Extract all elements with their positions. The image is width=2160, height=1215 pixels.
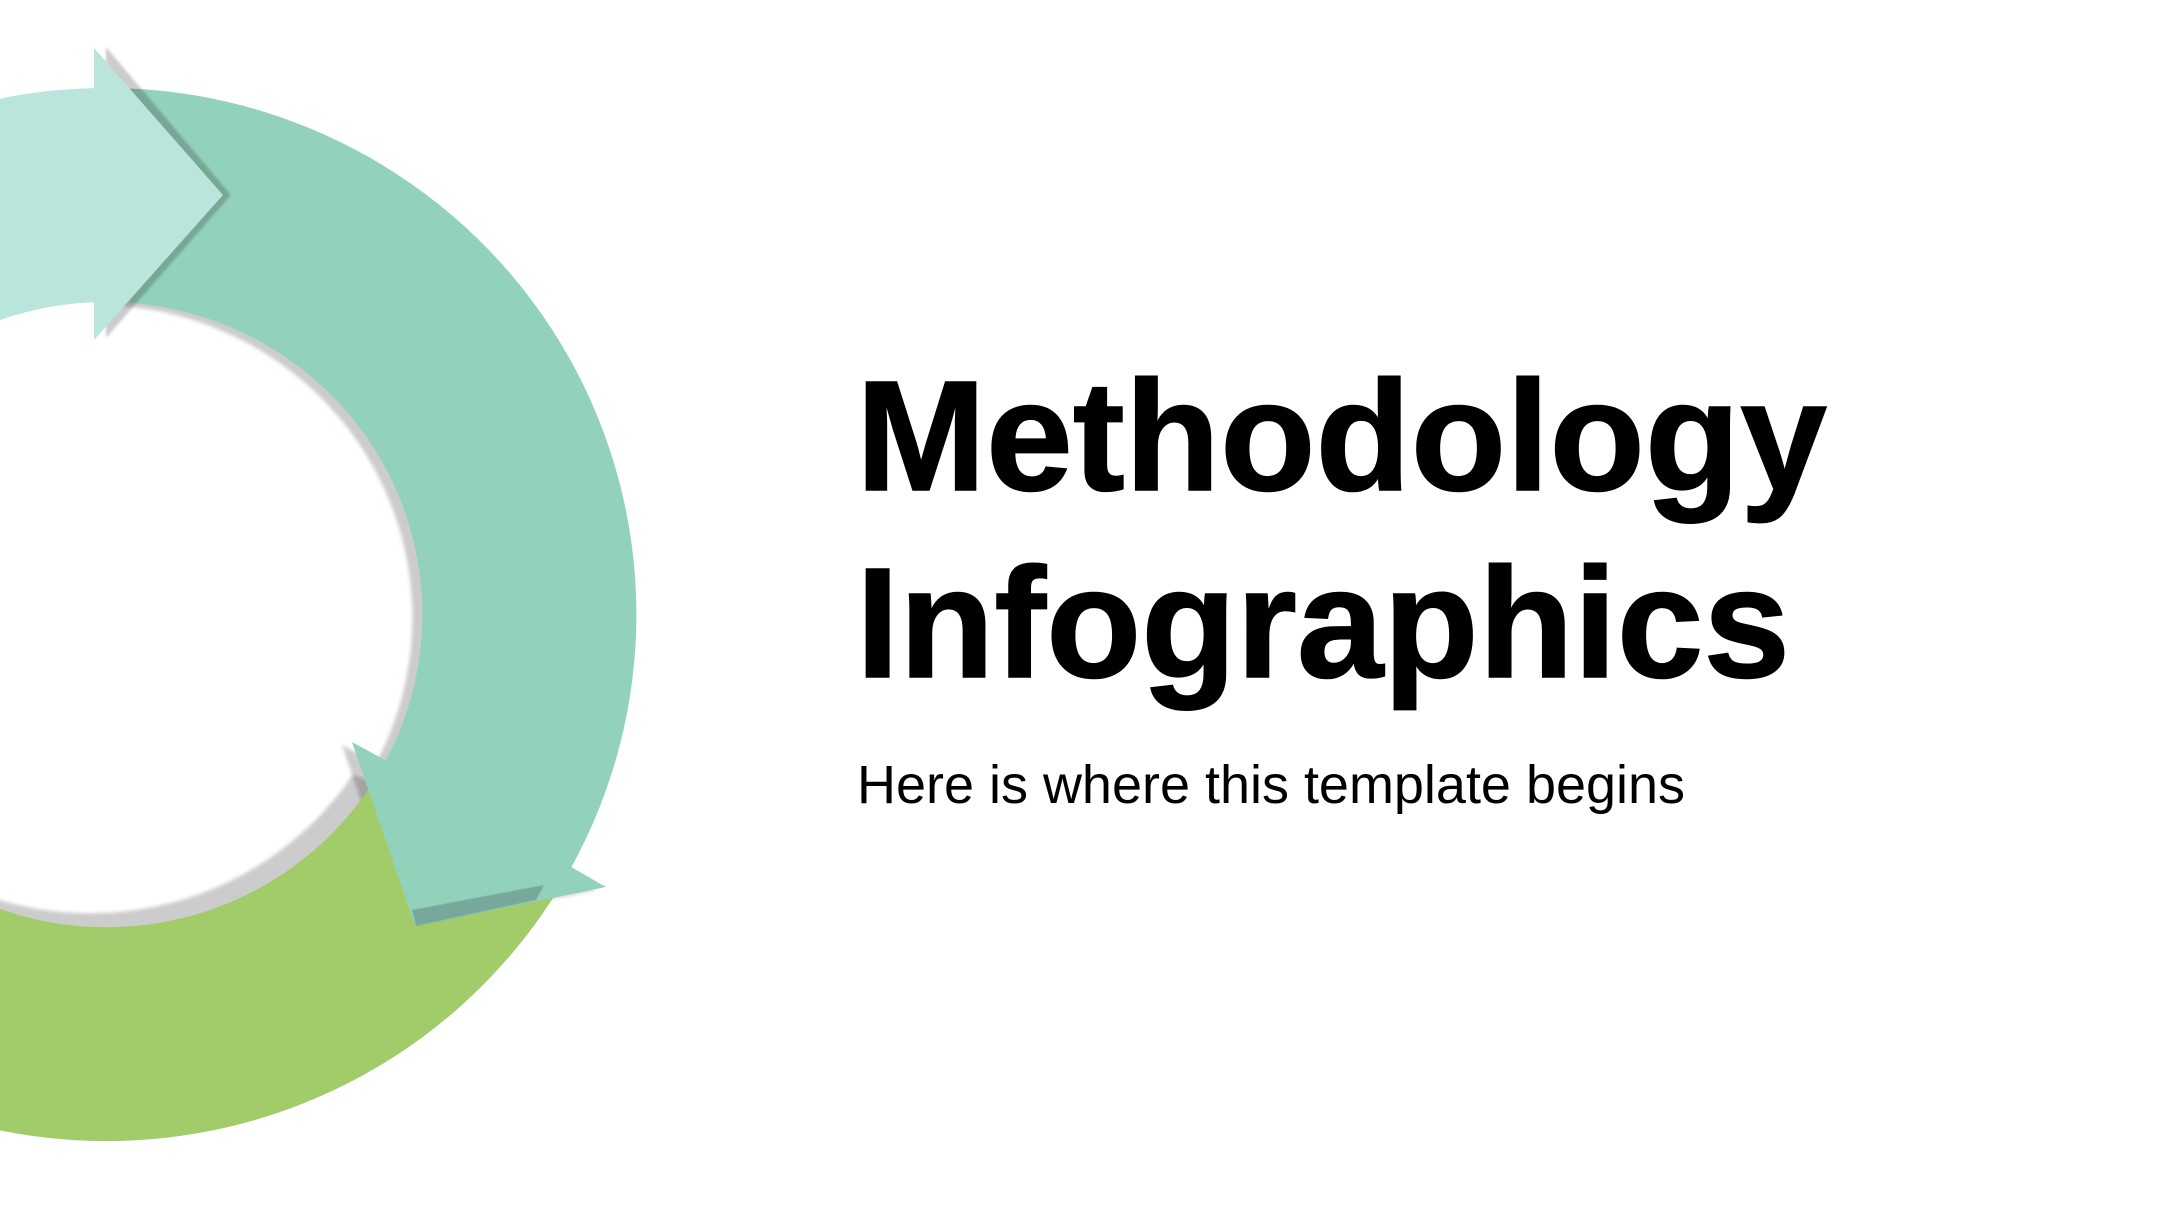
title: Infographics	[856, 536, 1790, 711]
title: Methodology	[856, 349, 1827, 524]
teal arrow tip shadow band	[412, 885, 544, 926]
green segment	[0, 789, 571, 1141]
cycle diagram	[0, 47, 636, 1141]
shadow of teal segment	[120, 92, 626, 929]
shadow of light arrow	[94, 47, 231, 338]
title	[856, 349, 1827, 711]
light arrow segment	[0, 48, 223, 349]
subtitle: Here is where this template begins	[857, 755, 1685, 815]
teal arrow segment	[130, 88, 636, 926]
shadow of green segment	[0, 775, 555, 1127]
